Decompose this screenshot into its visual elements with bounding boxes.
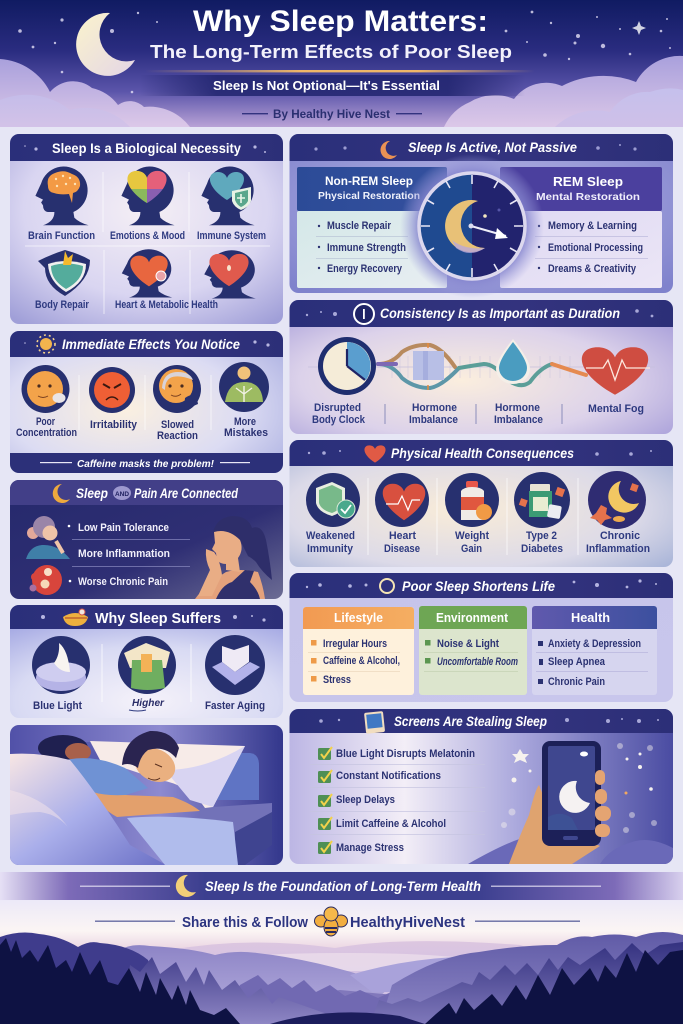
heading: Pain Are Connected [134, 486, 239, 501]
checklist: Constant Notifications [336, 770, 441, 782]
panel: sleep is active [290, 134, 673, 298]
clock [400, 154, 544, 298]
panel: sleep and pain [10, 480, 283, 599]
heart disease [375, 473, 429, 555]
column: rem sleep: Mental Restoration [536, 191, 640, 203]
icon: tablet [364, 711, 385, 734]
column: lifestyle: Stress [323, 674, 351, 686]
panel: poor sleep shortens life [290, 573, 673, 702]
higher: Higher [132, 697, 165, 709]
heading: Immediate Effects You Notice [62, 337, 240, 352]
type 2 diabetes: Diabetes [521, 543, 563, 555]
column: non-rem sleep: Physical Restoration [318, 190, 420, 202]
blanket [10, 754, 166, 865]
body clock [312, 337, 376, 426]
panel: consistency [290, 300, 673, 434]
chronic inflammation: Inflammation [586, 543, 650, 555]
share line: HealthyHiveNest [350, 914, 465, 931]
icon: brain function: Brain Function [28, 230, 95, 242]
heading: Sleep [76, 486, 108, 501]
hormone imbalance box: Imbalance [409, 414, 458, 426]
column: non-rem sleep: Energy Recovery [327, 263, 403, 275]
banner: foundation: Sleep Is the Foundation of Long-Term Health [205, 879, 481, 894]
more mistakes [219, 362, 269, 439]
weakened immunity: Immunity [307, 543, 354, 555]
column: environment [419, 606, 527, 695]
icon: body repair: Body Repair [35, 299, 90, 311]
icon: sun [37, 335, 55, 353]
icon: inflammation [30, 565, 62, 595]
title: Why Sleep Matters: [193, 5, 488, 38]
tagline band: Sleep Is Not Optional—It's Essential [213, 78, 440, 93]
icon: ring [380, 579, 394, 593]
icon: heart [364, 445, 386, 463]
icon: metabolic health [204, 250, 256, 299]
share line [95, 907, 580, 936]
body clock: Disrupted [314, 402, 361, 414]
water drop [494, 339, 543, 426]
column: rem sleep: Emotional Processing [548, 242, 643, 254]
column: environment: Noise & Light [437, 638, 499, 650]
heading: Physical Health Consequences [391, 446, 574, 461]
slowed reaction: Reaction [157, 430, 198, 442]
chronic inflammation [586, 471, 650, 555]
heart with pulse [582, 347, 650, 415]
illustration: hand holding phone [509, 741, 611, 864]
icon: emotions and mood [110, 165, 185, 242]
man head [122, 731, 181, 788]
column: health: Sleep Apnea [548, 656, 606, 668]
hormone imbalance box [409, 343, 458, 426]
panel: why sleep suffers [10, 605, 283, 718]
more mistakes: Mistakes [224, 427, 268, 439]
column: environment: Environment [436, 611, 509, 625]
connected timeline: wave [378, 345, 586, 388]
blue light [32, 636, 90, 712]
checklist [310, 747, 485, 854]
column: health: Chronic Pain [548, 676, 605, 688]
slowed reaction [153, 365, 201, 442]
tagline band [140, 75, 525, 96]
icon: heart [115, 249, 218, 311]
more mistakes: More [234, 416, 256, 428]
headboard [200, 753, 259, 800]
share line: Share this & Follow [182, 914, 308, 931]
checklist: Sleep Delays [336, 794, 395, 806]
column: non-rem sleep [297, 167, 447, 288]
column: lifestyle: Lifestyle [334, 611, 383, 625]
weight gain: Weight [455, 530, 489, 542]
heart disease: Heart [389, 530, 416, 542]
checklist: Blue Light Disrupts Melatonin [336, 748, 475, 760]
weight gain: Gain [461, 543, 482, 555]
subtitle: The Long-Term Effects of Poor Sleep [150, 42, 512, 62]
column: lifestyle [303, 607, 414, 695]
illustration: woman in profile [195, 516, 272, 599]
weakened immunity: Weakened [306, 530, 355, 542]
heart with pulse: Mental Fog [588, 403, 644, 415]
heading [76, 486, 239, 501]
icon: tired woman [26, 516, 70, 559]
type 2 diabetes [514, 472, 570, 555]
mattress [200, 803, 272, 865]
heading: Poor Sleep Shortens Life [402, 579, 555, 594]
column: lifestyle: Caffeine & Alcohol, [323, 655, 400, 667]
checklist: Manage Stress [336, 842, 404, 854]
column: health [532, 606, 657, 695]
text list [68, 522, 190, 588]
hormone imbalance box: Hormone [412, 402, 457, 414]
stars [18, 11, 671, 93]
panel: sleep is a biological necessity [10, 134, 283, 324]
column: lifestyle: Irregular Hours [323, 638, 387, 650]
higher [118, 636, 176, 711]
heading: Consistency Is as Important as Duration [380, 306, 620, 321]
faster aging: Faster Aging [205, 700, 265, 712]
irritability: Irritability [90, 419, 138, 431]
poor concentration [16, 365, 77, 439]
second sleeper [38, 735, 91, 761]
callout: caffeine: Caffeine masks the problem! [77, 458, 214, 470]
mid trees right [370, 942, 683, 1024]
poor concentration: Concentration [16, 427, 77, 439]
column: non-rem sleep: Non-REM Sleep [325, 174, 413, 188]
panel: physical health consequences [290, 440, 673, 567]
hills [468, 836, 673, 864]
column: rem sleep: Memory & Learning [548, 220, 637, 232]
illustration: misty mountains and forest [0, 932, 683, 1024]
type 2 diabetes: Type 2 [526, 530, 557, 542]
icon: moon [53, 484, 70, 503]
column: non-rem sleep: Immune Strength [327, 242, 406, 254]
pillows [38, 742, 100, 760]
heart disease: Disease [384, 543, 420, 555]
gold divider [145, 70, 535, 72]
column: rem sleep: Dreams & Creativity [548, 263, 637, 275]
heading: Sleep Is a Biological Necessity [52, 141, 241, 156]
icon: immune system: Immune System [197, 230, 266, 242]
panel: screens are stealing sleep [290, 709, 673, 864]
front trees left [0, 938, 240, 1024]
blue light: Blue Light [33, 700, 82, 712]
irritability [89, 367, 138, 431]
text list: Low Pain Tolerance [78, 522, 169, 534]
footer [0, 872, 683, 1024]
icon: immune system [197, 166, 266, 242]
arm [93, 792, 200, 817]
chronic inflammation: Chronic [600, 530, 640, 542]
water drop: Hormone [495, 402, 540, 414]
front hill [270, 1012, 425, 1024]
water drop: Imbalance [494, 414, 543, 426]
slowed reaction: Slowed [161, 419, 194, 431]
body clock: Body Clock [312, 414, 366, 426]
text list: More Inflammation [78, 548, 170, 560]
weakened immunity [306, 473, 360, 555]
floating stars [501, 743, 657, 833]
checklist: Limit Caffeine & Alcohol [336, 818, 446, 830]
byline: By Healthy Hive Nest [273, 109, 390, 121]
callout: caffeine [10, 453, 283, 473]
column: rem sleep: REM Sleep [553, 175, 623, 189]
icon: emotions and mood: Emotions & Mood [110, 230, 185, 242]
icon: body repair [35, 250, 90, 311]
panel: immediate effects [10, 331, 283, 473]
heading: Why Sleep Suffers [95, 610, 221, 627]
front trees right [425, 950, 683, 1024]
column: environment: Uncomfortable Room [437, 656, 518, 668]
faster aging [205, 635, 265, 712]
icon: bowl [63, 609, 88, 626]
icon: circle [354, 304, 374, 324]
clouds [0, 56, 683, 127]
mid trees left [120, 957, 372, 1024]
header banner [0, 0, 683, 127]
heading: Sleep Is Active, Not Passive [408, 140, 577, 155]
icon: crescent moon [76, 13, 135, 76]
poor concentration: Poor [36, 416, 56, 428]
heading: Screens Are Stealing Sleep [394, 714, 547, 729]
illustration: couple sleeping in bed [10, 725, 283, 865]
column: health: Health [571, 611, 610, 625]
weight gain [445, 473, 499, 555]
icon: heart: Heart & Metabolic Health [115, 299, 218, 311]
banner: foundation [0, 872, 683, 900]
column: health: Anxiety & Depression [548, 638, 641, 650]
column: non-rem sleep: Muscle Repair [327, 220, 392, 232]
column: rem sleep [500, 167, 662, 288]
text list: Worse Chronic Pain [78, 576, 168, 588]
man shirt [58, 758, 148, 800]
misty trees [225, 975, 440, 1024]
icon: orange moon [381, 141, 397, 159]
icon: brain function [28, 166, 95, 242]
heading: AND [115, 491, 129, 498]
icon: bee [314, 907, 348, 936]
